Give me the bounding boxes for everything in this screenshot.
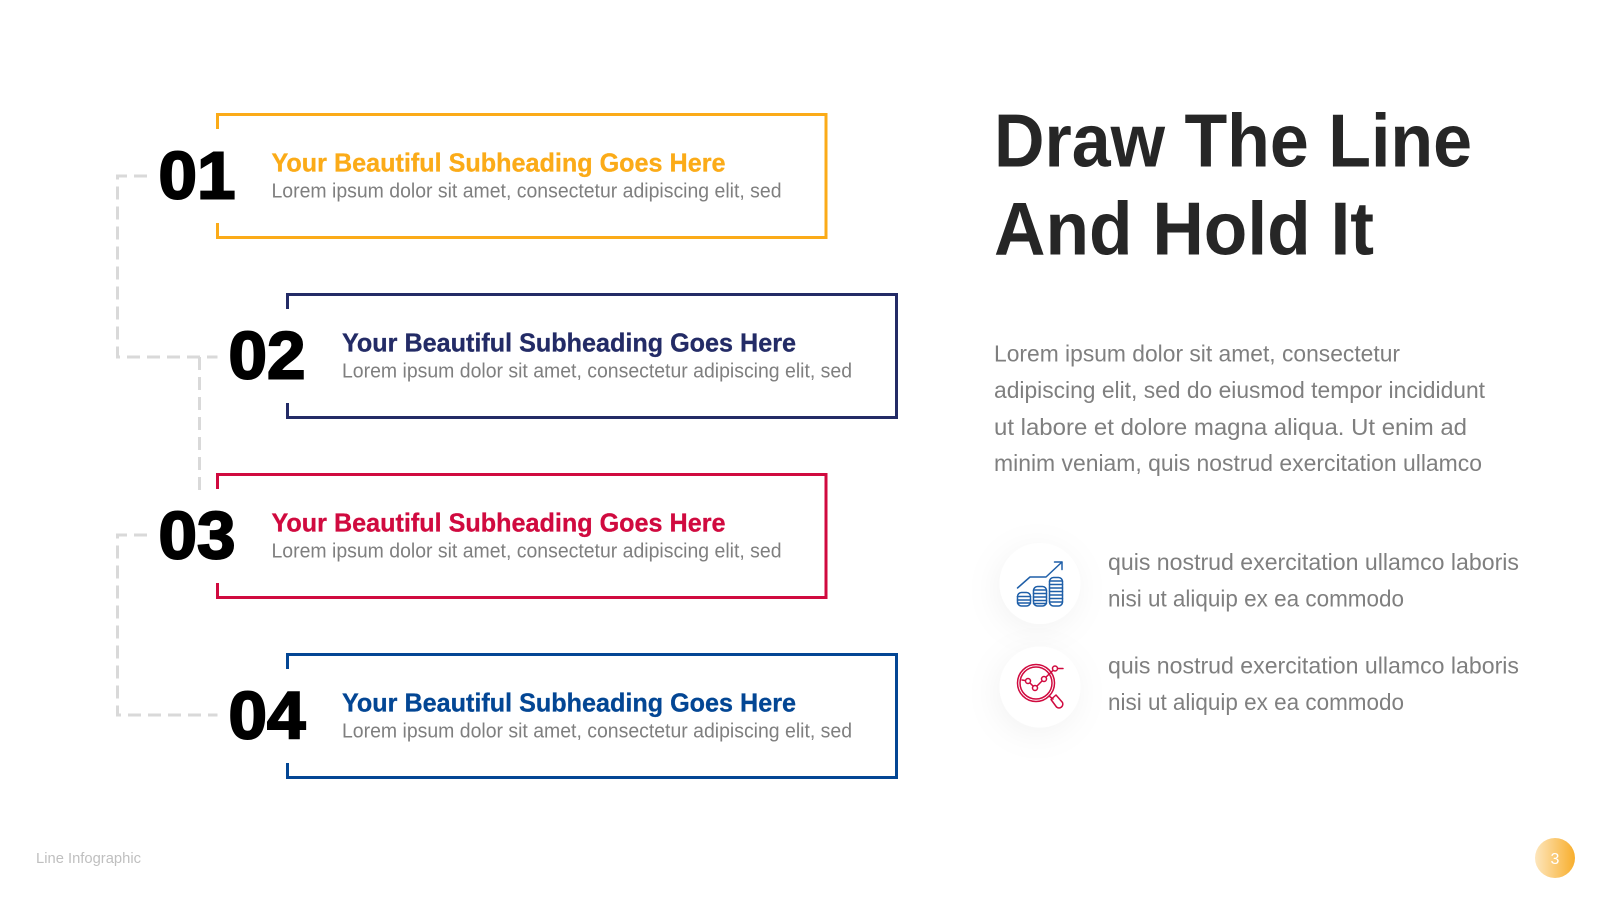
text: first bullet — [1108, 549, 1519, 612]
text: first bullet: quis nostrud exercitation ullamco laboris — [1108, 549, 1519, 575]
number 04: 04 — [228, 678, 306, 754]
title: Draw The Line — [994, 98, 1472, 182]
number 01: 01 — [158, 138, 236, 214]
number 02: 02 — [228, 318, 306, 394]
panel: step 03 — [158, 474, 826, 598]
body paragraph: ut labore et dolore magna aliqua. Ut enim ad — [994, 414, 1467, 440]
body paragraph: Lorem ipsum dolor sit amet, consectetur — [994, 340, 1400, 366]
title: And Hold It — [994, 186, 1374, 270]
dashed connector lines — [118, 176, 218, 715]
description 02: Lorem ipsum dolor sit amet, consectetur adipiscing elit, sed — [342, 360, 852, 382]
subheading 04: Your Beautiful Subheading Goes Here — [342, 688, 796, 718]
description 04: Lorem ipsum dolor sit amet, consectetur adipiscing elit, sed — [342, 720, 852, 742]
subheading 02: Your Beautiful Subheading Goes Here — [342, 328, 796, 358]
icon: magnifier over line chart — [1000, 646, 1080, 728]
description 03: Lorem ipsum dolor sit amet, consectetur adipiscing elit, sed — [272, 540, 782, 562]
title — [994, 98, 1472, 270]
body paragraph — [994, 340, 1485, 476]
description 01: Lorem ipsum dolor sit amet, consectetur adipiscing elit, sed — [272, 180, 782, 202]
page number badge — [1535, 838, 1575, 878]
body paragraph: adipiscing elit, sed do eiusmod tempor incididunt — [994, 377, 1485, 403]
subheading 01: Your Beautiful Subheading Goes Here — [272, 148, 726, 178]
body paragraph: minim veniam, quis nostrud exercitation ullamco — [994, 450, 1482, 476]
text: second bullet: quis nostrud exercitation ullamco laboris — [1108, 652, 1519, 678]
subheading 03: Your Beautiful Subheading Goes Here — [272, 508, 726, 538]
text: second bullet — [1108, 652, 1519, 715]
number 03: 03 — [158, 498, 236, 574]
footer label: Line Infographic — [36, 850, 141, 867]
text: first bullet: nisi ut aliquip ex ea commodo — [1108, 586, 1404, 612]
page number badge: 3 — [1551, 851, 1560, 868]
panel: step 04 — [228, 654, 896, 778]
panel: step 01 — [158, 114, 826, 238]
text: second bullet: nisi ut aliquip ex ea commodo — [1108, 689, 1404, 715]
icon: coins and rising arrow — [1000, 543, 1080, 624]
panel: step 02 — [228, 294, 896, 418]
